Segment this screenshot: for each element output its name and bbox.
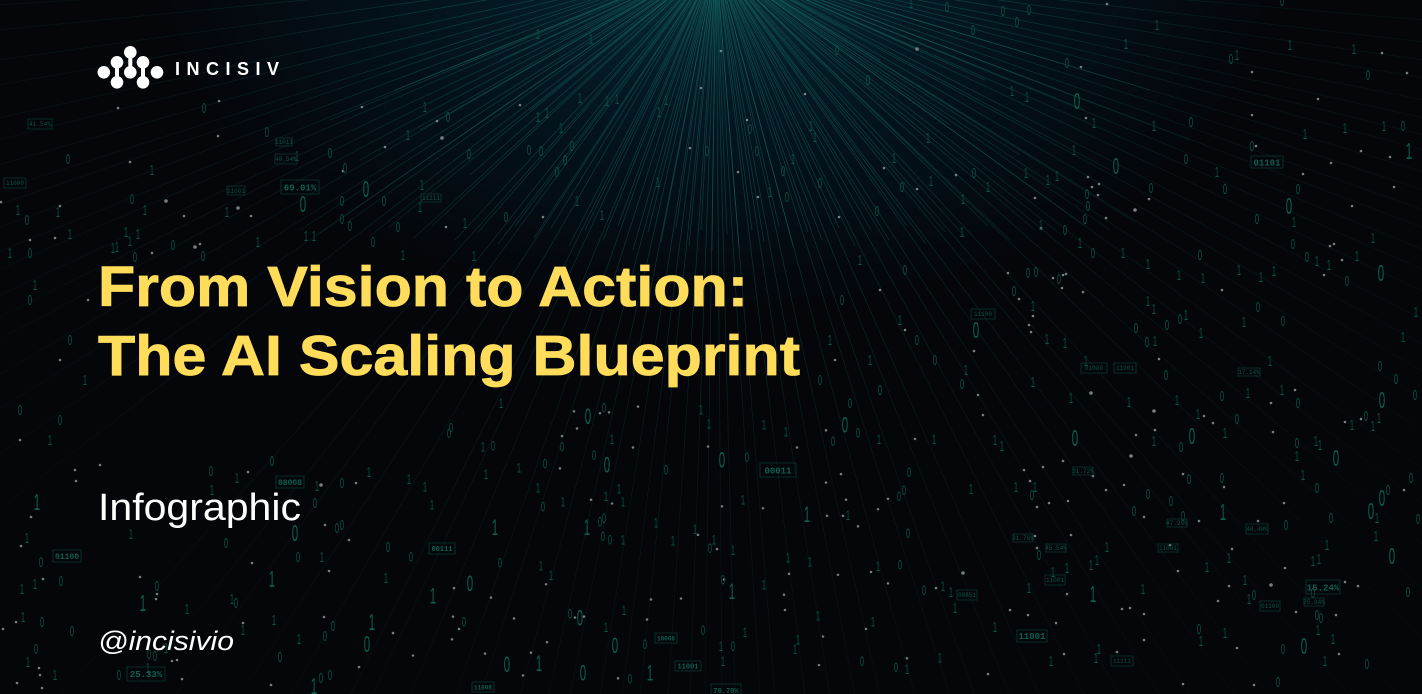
boxed data labels: 41.54%: [29, 121, 51, 128]
binary digits, lower centre: 1111111111: [549, 560, 945, 655]
large binary digits: 1111111111: [295, 98, 476, 481]
large binary digits: 0000000000: [1030, 479, 1420, 534]
boxed data labels: 11001: [1018, 632, 1046, 642]
binary digits, lower centre: 0000000000: [447, 397, 860, 478]
large binary digits: 0000000000: [39, 474, 390, 595]
boxed data labels: 11001: [1046, 577, 1064, 584]
large binary digits: 1111111111: [1010, 16, 1356, 137]
large binary digits: 11111111: [34, 139, 1412, 694]
title line 2: The AI Scaling Blueprint: [98, 324, 800, 388]
boxed data labels: 11000: [6, 180, 24, 187]
boxed data labels: 01000: [1085, 365, 1103, 372]
large binary digits: 0000000000: [1037, 546, 1410, 691]
binary digits, lower centre: 0000000000: [541, 449, 911, 548]
binary digits, lower centre: 1111111: [430, 502, 810, 686]
boxed data labels: 08008: [278, 479, 302, 488]
large binary digits: 1111111111: [536, 0, 933, 224]
large binary digits: 0000000000: [1179, 357, 1417, 488]
boxed data labels: 31.76%: [1012, 535, 1034, 542]
large binary digits: 0000000000: [960, 298, 1398, 405]
boxed data labels: 00851: [958, 592, 976, 599]
large binary digits: 0000000000: [18, 261, 937, 429]
large binary digits: 1111111: [33, 251, 902, 449]
social handle: @incisivio: [98, 626, 234, 656]
subtitle: Infographic: Infographic: [98, 487, 301, 529]
large binary digits: 0000000000: [133, 99, 471, 480]
large binary digits: 1111111111: [1051, 527, 1378, 581]
large binary digits: 00000000000000000: [292, 89, 1395, 659]
binary digits, lower centre: 0000000000: [409, 527, 926, 639]
boxed data labels: 01100: [55, 553, 79, 562]
boxed data labels: 47.20%: [1166, 520, 1188, 527]
boxed data labels: 11111: [422, 195, 440, 202]
binary digits, lower centre: 00000: [628, 638, 898, 687]
large binary digits: 1111111111: [964, 297, 1405, 407]
boxed data labels: 11100: [974, 311, 992, 318]
large binary digits: 1111111111: [1146, 261, 1418, 342]
boxed data labels: 11111: [1113, 658, 1131, 665]
boxed data labels: 10008: [657, 636, 675, 642]
boxed data labels: 00011: [764, 466, 792, 476]
large binary digits: 1111111111: [1127, 381, 1381, 450]
large binary digits: 1111111111: [8, 203, 308, 262]
large binary digits: 0000000000: [972, 137, 1300, 228]
large binary digits: 1111111111: [20, 469, 388, 608]
binary digits, lower centre: 1111111111: [407, 468, 745, 513]
large binary digits: 1111111111: [536, 25, 930, 147]
boxed data labels: 11001: [1159, 545, 1177, 552]
large binary digits: 0000000000: [25, 108, 450, 262]
title line 1: From Vision to Action:: [98, 255, 748, 319]
boxed data labels: [4, 119, 1340, 694]
boxed data labels: 11001: [227, 188, 245, 195]
logo wordmark: INCISIV: [175, 59, 279, 79]
boxed data labels: 75.94%: [1303, 599, 1325, 606]
icon: connected dots logo mark: [98, 46, 163, 89]
large binary digits: 1111111111: [961, 117, 1386, 231]
boxed data labels: 01100: [1261, 603, 1279, 610]
binary digits, lower centre: 1111111111: [539, 509, 850, 574]
binary digits, lower centre: 1111111111: [481, 397, 936, 476]
boxed data labels: 45.54%: [1045, 545, 1067, 552]
binary digits, lower centre: 000000000: [467, 404, 848, 686]
binary digits, lower centre: 11111: [721, 633, 942, 678]
boxed data labels: 11011: [275, 139, 293, 146]
boxed data labels: 25.33%: [130, 670, 163, 680]
large binary digits: 0000000000: [504, 0, 949, 226]
boxed data labels: 17.14%: [1238, 369, 1260, 376]
large binary digits: 1111111111: [16, 161, 1335, 670]
large binary digits: 0000000000: [270, 137, 759, 687]
boxed data labels: 11008: [474, 684, 492, 692]
boxed data labels: 69.01%: [284, 184, 317, 194]
boxed data labels: 11001: [677, 664, 699, 672]
boxed data labels: 48.54%: [275, 156, 297, 163]
boxed data labels: 48.40%: [1246, 526, 1268, 533]
boxed data labels: 01101: [1253, 158, 1281, 168]
boxed data labels: 31.72%: [1072, 468, 1094, 475]
binary digits, lower centre: [407, 397, 945, 687]
boxed data labels: 11001: [1116, 365, 1134, 372]
large binary digits: 0000000000: [34, 594, 335, 684]
large binary digits: 1111111111: [21, 91, 668, 684]
large binary digits: 0000000000: [1012, 221, 1349, 300]
boxed data labels: 15.24%: [1307, 584, 1340, 594]
boxed data labels: 00111: [431, 546, 453, 554]
large binary digits: 1111111111: [960, 216, 1375, 284]
large binary digits: 1111111111: [969, 431, 1379, 527]
large binary digits: 1111111111: [949, 558, 1320, 642]
